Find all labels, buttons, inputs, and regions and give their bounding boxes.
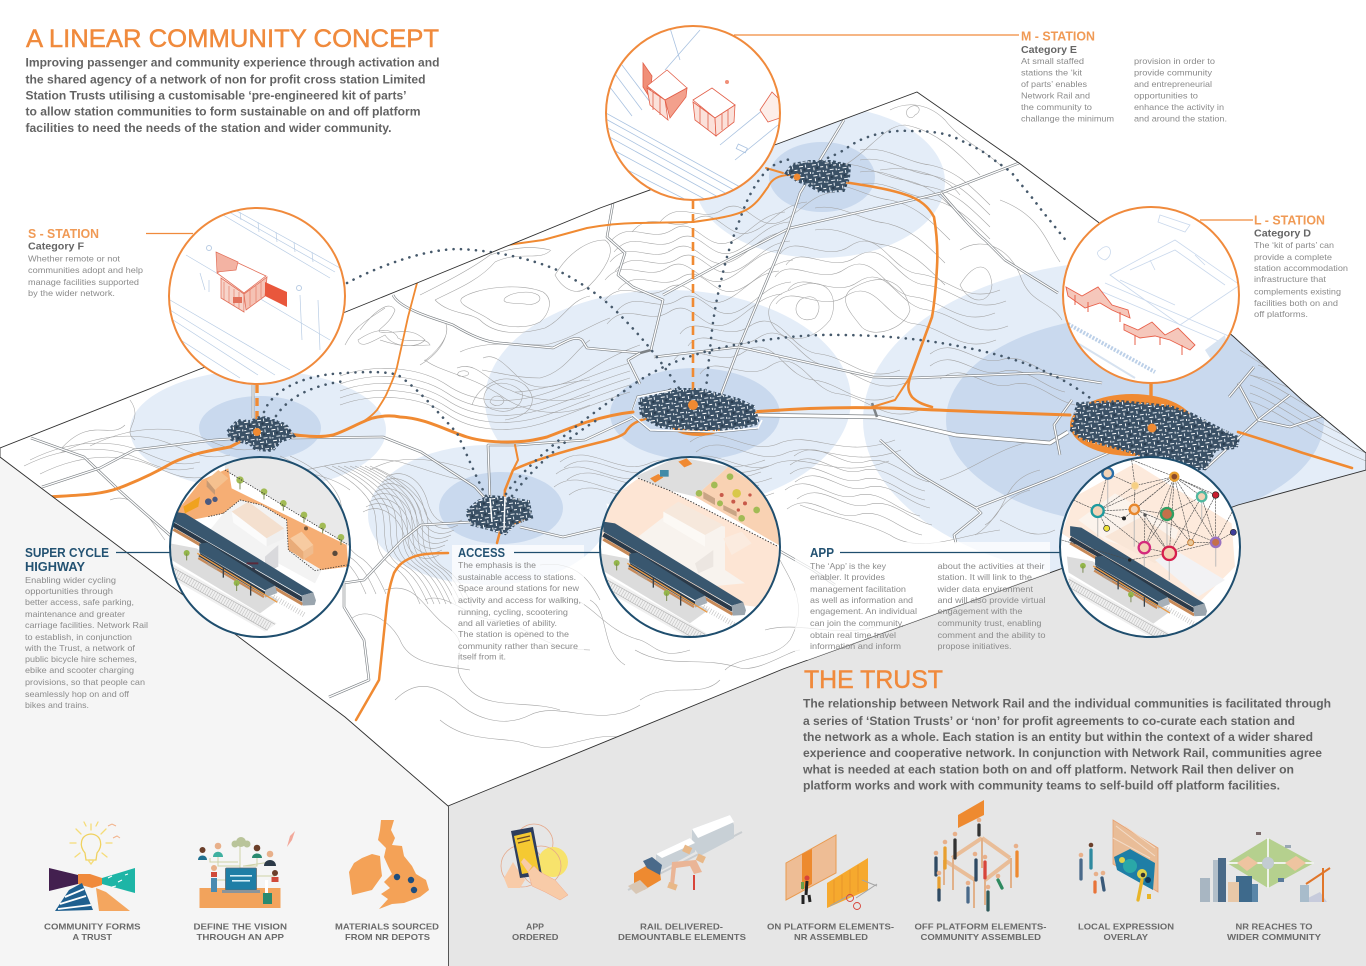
icon: community app on laptop [198, 831, 295, 908]
label: APP [526, 922, 544, 932]
text block: access: activity and access for walking, [458, 595, 581, 605]
text block: super cycle highway: better access, safe parking, [25, 597, 134, 607]
label: ORDERED [512, 932, 558, 942]
leader: app [840, 552, 1060, 554]
label: RAIL DELIVERED- [640, 922, 723, 932]
text block: the trust: The relationship between Network Rail and the individual communities is facilitated through [803, 698, 1331, 710]
icon: timber pavilion with community [934, 800, 1018, 910]
label: A TRUST [72, 932, 113, 942]
text block: S station: S - STATION [28, 227, 99, 241]
text block: S station: Whether remote or not [28, 254, 121, 264]
text block: super cycle highway: opportunities through [25, 586, 113, 596]
text block: M station: Category E [1021, 44, 1077, 56]
text block: access: Space around stations for new [458, 583, 580, 593]
text block: super cycle highway: carriage facilities. Network Rail [25, 620, 148, 630]
label [335, 922, 439, 942]
text block: app: as well as information and [810, 595, 913, 605]
text block: app: station. It will link to the [938, 572, 1032, 582]
text block: app: can join the community, [810, 618, 904, 628]
text block: super cycle highway: seamlessly hop on and off [25, 689, 130, 699]
road network [31, 120, 1340, 697]
intro text: to allow station communities to form sustainable on and off platform [26, 106, 420, 118]
label: NR REACHES TO [1236, 922, 1313, 932]
label: LOCAL EXPRESSION [1078, 922, 1174, 932]
text block: the trust [802, 698, 1331, 792]
step: define the vision [194, 831, 295, 942]
text block: app: comment and the ability to [938, 630, 1046, 640]
intro text: facilities to need the needs of the station and wider community. [26, 123, 392, 135]
text block: access: ACCESS [458, 546, 505, 560]
town: S station [228, 417, 293, 450]
label [767, 922, 894, 942]
text block: app: wider data environment [936, 584, 1034, 594]
text block: M station: provision in order to [1134, 56, 1215, 66]
orange routes [46, 168, 1352, 720]
dotted network links [264, 131, 1090, 496]
text block: super cycle highway: with the Trust, a network of [24, 643, 136, 653]
text block: L station: facilities both on and [1254, 298, 1338, 308]
detail circle: S station [165, 205, 345, 384]
white text backing: app [795, 542, 1050, 660]
icon: mural panel and painters [1079, 820, 1158, 900]
text block: L station: infrastructure that [1254, 274, 1327, 284]
text block: access: and all varieties of ability. [458, 618, 557, 628]
text block: super cycle highway: SUPER CYCLE [25, 546, 109, 560]
step: materials sourced [335, 820, 439, 942]
icon: platform panels and bike [786, 835, 877, 910]
text block: access: The emphasis is the [458, 560, 536, 570]
label: NR ASSEMBLED [794, 932, 868, 942]
text block: S station: manage facilities supported [28, 277, 139, 287]
label: ON PLATFORM ELEMENTS- [767, 922, 894, 932]
label [194, 922, 287, 942]
leader: super cycle highway [116, 552, 170, 554]
town: access station [467, 497, 531, 533]
step: app ordered [501, 824, 568, 942]
text block: app: information and inform [810, 641, 901, 651]
label: FROM NR DEPOTS [345, 932, 430, 942]
intro text: Station Trusts utilising a customisable ‘pre-engineered kit of parts’ [26, 90, 406, 102]
text block: the trust: experience and cooperative network. In conjunction with Network Rail, communities agree [803, 748, 1322, 760]
text block: M station: M - STATION [1021, 30, 1095, 44]
label [914, 922, 1047, 942]
text block: super cycle highway: provisions, so that people can [25, 677, 145, 687]
text block: app: and will also provide virtual [938, 595, 1046, 605]
text block: M station: opportunities to [1134, 90, 1198, 100]
line: spine between grey panels [448, 806, 450, 966]
label [1227, 922, 1321, 942]
text block: L station [1254, 214, 1348, 319]
step: local expression overlay [1078, 820, 1174, 942]
text block: app: obtain real time travel [810, 630, 896, 640]
intro text: the shared agency of a network of non for profit cross station Limited [26, 74, 426, 86]
label: DEFINE THE VISION [194, 922, 287, 932]
label: COMMUNITY FORMS [44, 922, 141, 932]
text block: app [810, 546, 1046, 651]
text block: M station: Network Rail and [1021, 90, 1090, 100]
text block: M station: and around the station. [1134, 114, 1227, 124]
leader: access [514, 552, 600, 554]
step: on platform elements [767, 835, 894, 942]
text block: M station: enhance the activity in [1134, 102, 1224, 112]
contour lines [24, 105, 1366, 747]
text block: app: about the activities at their [938, 561, 1045, 571]
text block: access: The station is opened to the [458, 629, 569, 639]
text block: L station: off platforms. [1254, 309, 1308, 319]
text block: L station: provide a complete [1254, 252, 1332, 262]
detail circle: access [599, 456, 781, 638]
text block: M station: challange the minimum [1021, 114, 1114, 124]
leader: M station [734, 34, 1019, 36]
text block: L station: complements existing [1254, 286, 1341, 296]
text block: L station: The ‘kit of parts’ can [1254, 240, 1334, 250]
town: M station [787, 162, 849, 191]
text block: M station: stations the ‘kit [1021, 68, 1083, 78]
leader: L station [1200, 219, 1253, 221]
icon: UK map with depots [349, 820, 429, 909]
label [618, 922, 746, 942]
text block: app: management facilitation [810, 584, 906, 594]
panel: left grey background [0, 455, 448, 966]
text block: the trust: what is needed at each station both on and off platform. Network Rail then deliver on [802, 764, 1294, 776]
label: OFF PLATFORM ELEMENTS- [914, 922, 1047, 932]
text block: access: running, cycling, scootering [458, 607, 568, 617]
panel: right grey background [448, 470, 1366, 966]
text block: M station: and entrepreneurial [1134, 79, 1212, 89]
text block: access: sustainable access to stations. [458, 572, 576, 582]
text block: L station: Category D [1254, 228, 1311, 240]
title: A LINEAR COMMUNITY CONCEPT [26, 25, 439, 53]
text block: M station [1021, 30, 1227, 124]
step: off platform elements [914, 800, 1047, 942]
label: WIDER COMMUNITY [1227, 932, 1321, 942]
text block: super cycle highway: HIGHWAY [25, 560, 86, 574]
intro text [26, 58, 440, 135]
text block: the trust: a series of ‘Station Trusts’ or ‘non’ for profit agreements to co-curate each station and [803, 716, 1295, 728]
terrain outline [0, 92, 1366, 806]
label: OVERLAY [1104, 932, 1148, 942]
catchment zones [130, 106, 1366, 585]
text block: access: itself from it. [458, 652, 506, 662]
label: MATERIALS SOURCED [335, 922, 439, 932]
label [512, 922, 558, 942]
text block: S station: Category F [28, 240, 85, 252]
text block: super cycle highway: Enabling wider cycling [25, 575, 116, 585]
town: L station [1070, 394, 1238, 468]
text block: super cycle highway: to establish, in conjunction [25, 632, 132, 642]
text block: M station: of parts’ enables [1021, 79, 1087, 89]
icon: locomotive and modules [628, 815, 742, 894]
label [44, 922, 141, 942]
text block: M station: provide community [1134, 68, 1213, 78]
text block: access [458, 546, 581, 662]
detail circle: super cycle highway [170, 450, 358, 637]
text block: L station: L - STATION [1254, 214, 1325, 228]
white text backing: access [452, 545, 584, 665]
text block: super cycle highway: maintenance and greater [25, 609, 125, 619]
text block: M station: At small staffed [1021, 56, 1084, 66]
heading: the trust: THE TRUST [804, 666, 943, 694]
icon: civic square and towers [1200, 832, 1330, 902]
text block: M station: the community to [1021, 102, 1092, 112]
label [1078, 922, 1174, 942]
text block: the trust: the network as a whole. Each station is an entity but within the context of a wider shared [803, 732, 1313, 744]
label: COMMUNITY ASSEMBLED [920, 932, 1041, 942]
intro text: Improving passenger and community experience through activation and [26, 58, 440, 70]
text block: S station: by the wider network. [28, 288, 115, 298]
text block: super cycle highway: bikes and trains. [25, 700, 89, 710]
text block: app: community trust, enabling [938, 618, 1042, 628]
text block: S station [28, 227, 143, 298]
text block: access: community rather than secure [458, 641, 578, 651]
text block: the trust: platform works and work with community teams to self-build off platform facilities. [803, 780, 1280, 792]
step: community forms a trust [44, 822, 141, 942]
icon: phone in hands [501, 824, 568, 900]
text block: app: propose initiatives. [938, 641, 1012, 651]
detail circle: app network [1060, 457, 1240, 641]
label: THROUGH AN APP [196, 932, 284, 942]
text block: L station: station accommodation [1254, 263, 1348, 273]
text block: super cycle highway [24, 546, 148, 710]
label: DEMOUNTABLE ELEMENTS [618, 932, 746, 942]
text block: S station: communities adopt and help [28, 265, 143, 275]
detail circle: L station [1063, 207, 1240, 383]
step: NR reaches to wider community [1200, 832, 1330, 942]
text block: app: engagement with the [938, 606, 1023, 616]
text block: app: APP [810, 546, 834, 560]
town: central station [632, 389, 762, 436]
text block: app: engagement. An individual [810, 606, 917, 616]
leader: S station [146, 232, 193, 234]
detail circle: M station [604, 26, 780, 212]
text block: app: The ‘App’ is the key [810, 561, 887, 571]
text block: super cycle highway: ebike and scooter charging [25, 665, 134, 675]
step: rail delivered [618, 815, 746, 942]
icon: idea bulb and hands [49, 822, 135, 911]
text block: super cycle highway: public bicycle hire schemes, [25, 654, 137, 664]
text block: app: enabler. It provides [810, 572, 885, 582]
